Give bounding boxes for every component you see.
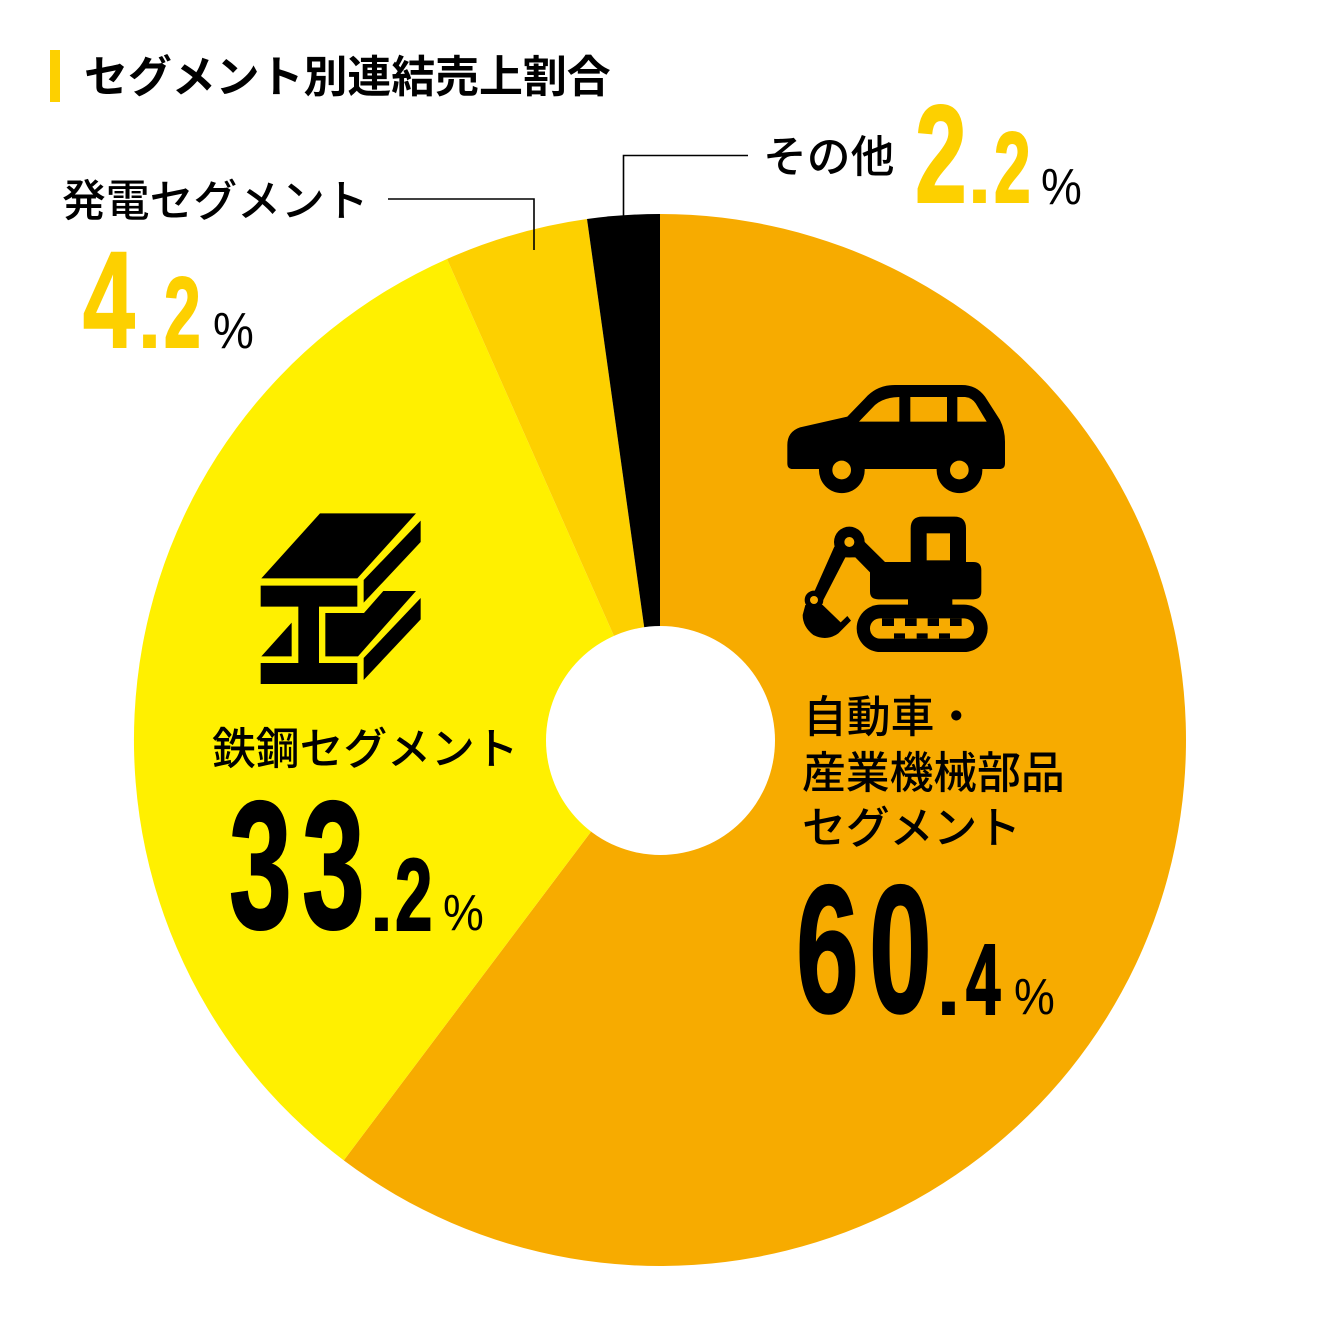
label: power 4.2%: % <box>213 303 254 360</box>
label: other 2.2%: . <box>967 123 992 223</box>
label: automotive and industrial machinery 60.4%: セグメント <box>802 804 1021 853</box>
title: セグメント別連結売上割合 <box>84 53 611 102</box>
label: power 4.2%: 2 <box>164 256 201 368</box>
label: steel 33.2%: 3 <box>229 765 292 968</box>
label: other 2.2%: 2 <box>994 111 1031 223</box>
label: steel 33.2%: 鉄鋼セグメント <box>212 725 519 774</box>
slice: steel 33.2% <box>134 259 660 1160</box>
label: automotive and industrial machinery 60.4%: 自動車・ <box>803 693 978 742</box>
label: automotive and industrial machinery 60.4%: 4 <box>966 924 1000 1036</box>
label: automotive and industrial machinery 60.4%: . <box>936 935 961 1035</box>
label: power 4.2%: 4 <box>83 223 135 376</box>
icon: excavator <box>803 517 988 652</box>
label: automotive and industrial machinery 60.4%: % <box>1014 969 1055 1026</box>
label: other 2.2% <box>763 77 1082 233</box>
slice: other 2.2% <box>587 214 660 740</box>
icon: car <box>787 385 1005 493</box>
label: other 2.2%: % <box>1041 159 1082 216</box>
label: steel 33.2% <box>212 725 519 968</box>
label: automotive and industrial machinery 60.4% <box>796 693 1065 1052</box>
leader line: power <box>388 199 534 250</box>
label: steel 33.2%: 3 <box>302 765 365 968</box>
donut hole <box>546 626 775 855</box>
label: other 2.2%: その他 <box>763 133 894 182</box>
label: steel 33.2%: 2 <box>395 839 432 952</box>
slice: power 4.2% <box>447 219 660 740</box>
donut chart <box>134 214 1186 1266</box>
label: power 4.2% <box>62 177 369 376</box>
label: power 4.2%: 発電セグメント <box>62 177 369 226</box>
label: power 4.2%: . <box>137 268 162 368</box>
label: automotive and industrial machinery 60.4%: 産業機械部品 <box>802 749 1065 798</box>
label: automotive and industrial machinery 60.4%: 6 <box>796 849 859 1052</box>
icon: steel beam <box>261 513 421 684</box>
slice: automotive 60.4% <box>344 214 1186 1266</box>
label: steel 33.2%: % <box>443 885 484 942</box>
label: steel 33.2%: . <box>369 851 394 951</box>
leader line: other <box>624 156 748 216</box>
label: other 2.2%: 2 <box>915 77 967 233</box>
label: automotive and industrial machinery 60.4%: 0 <box>869 849 932 1052</box>
